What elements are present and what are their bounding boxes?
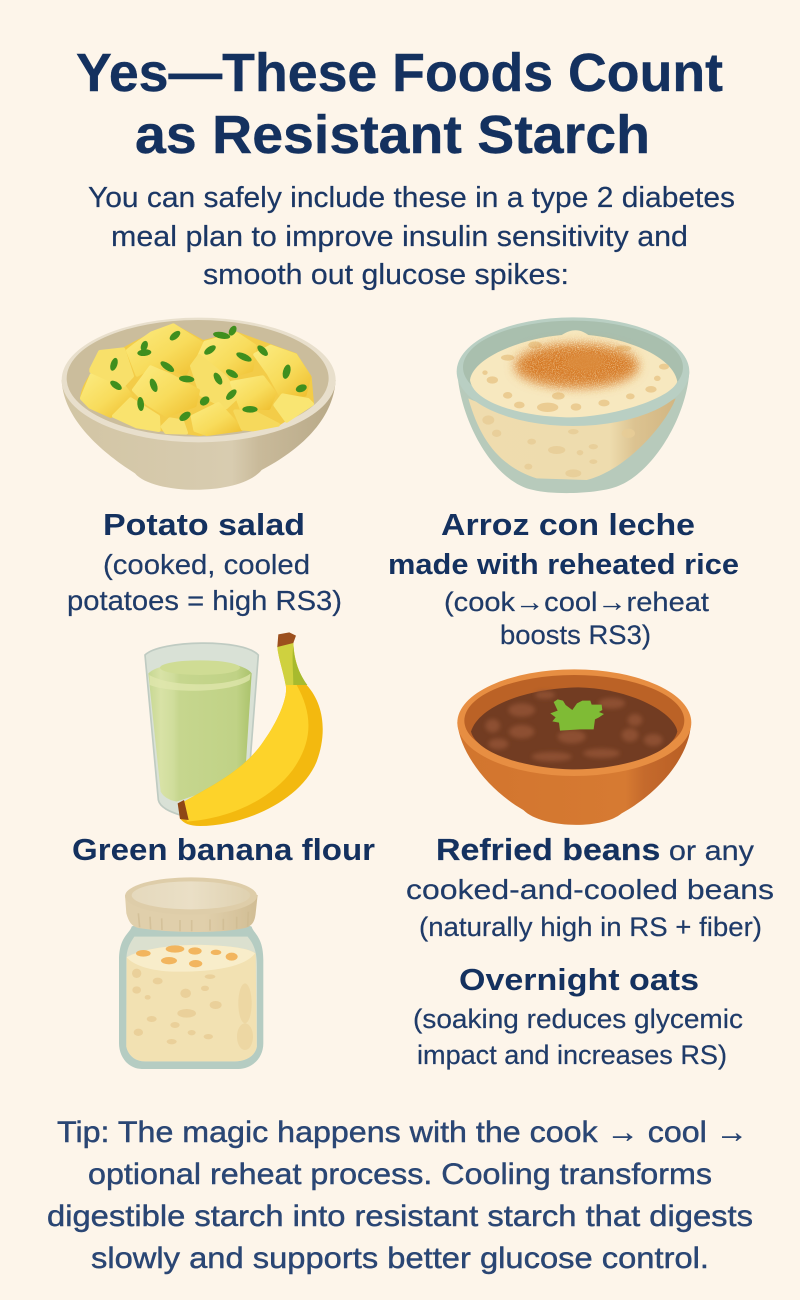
description: potato salad: (cooked, cooled [103, 549, 310, 580]
heading: arroz con leche: made with reheated rice [388, 549, 739, 581]
heading: refried beans: Refried beans or any [436, 832, 754, 867]
icon: refried beans bowl [457, 669, 691, 825]
description: overnight oats [413, 1004, 743, 1070]
oats [126, 945, 257, 1061]
heading: arroz con leche [388, 507, 739, 650]
title [76, 43, 723, 165]
glass of smoothie [145, 643, 258, 815]
description: arroz con leche: (cook→cool→reheat [444, 587, 710, 617]
description: refried beans: (naturally high in RS + fiber) [419, 912, 762, 942]
tip text: optional reheat process. Cooling transforms [88, 1158, 712, 1191]
glass jar [119, 924, 263, 1069]
heading: refried beans [406, 832, 774, 942]
description: refried beans: cooked-and-cooled beans [406, 874, 774, 905]
description: arroz con leche: boosts RS3) [500, 620, 651, 650]
intro text [88, 182, 735, 291]
tip text: slowly and supports better glucose control. [91, 1242, 709, 1275]
banana [178, 632, 323, 826]
intro text: You can safely include these in a type 2 diabetes [88, 182, 735, 214]
heading: arroz con leche: Arroz con leche [441, 507, 695, 542]
icon: arroz con leche bowl [457, 317, 689, 493]
heading: overnight oats [413, 962, 743, 1070]
title: Yes—These Foods Count [76, 43, 723, 103]
title: as Resistant Starch [135, 105, 650, 165]
description: refried beans [406, 874, 774, 942]
cilantro leaf [550, 699, 604, 731]
tip text: Tip: The magic happens with the cook → cool → [57, 1116, 748, 1149]
intro text: meal plan to improve insulin sensitivity and [111, 221, 688, 253]
description: arroz con leche [444, 587, 710, 650]
heading: potato salad: Potato salad [103, 507, 305, 542]
lid [125, 877, 258, 932]
heading: potato salad [67, 507, 342, 616]
icon: overnight oats jar [119, 877, 263, 1069]
heading: overnight oats: Overnight oats [459, 962, 699, 997]
tip text [47, 1116, 753, 1275]
icon: green smoothie and banana [145, 632, 323, 826]
description: potato salad [67, 549, 342, 616]
description: overnight oats: impact and increases RS) [417, 1040, 727, 1070]
heading: green banana flour: Green banana flour [72, 832, 375, 867]
description: potato salad: potatoes = high RS3) [67, 585, 342, 616]
icon: potato salad bowl [62, 318, 336, 490]
tip text: digestible starch into resistant starch that digests [47, 1200, 753, 1233]
description: overnight oats: (soaking reduces glycemic [413, 1004, 743, 1034]
intro text: smooth out glucose spikes: [203, 259, 569, 291]
